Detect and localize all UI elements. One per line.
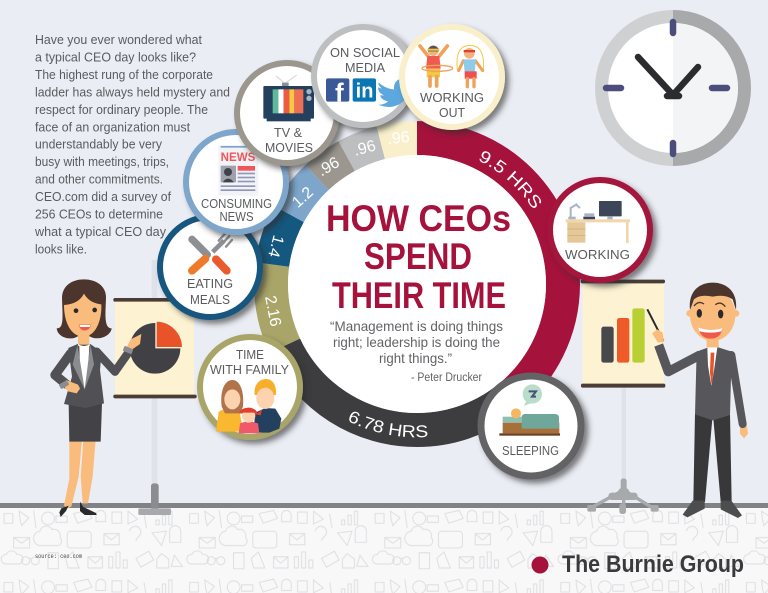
icon: newspaper: NEWS: [221, 150, 255, 164]
icon: television: [263, 75, 314, 121]
icon: social logos: [326, 78, 413, 108]
circle: on social media: MEDIA: [345, 61, 386, 75]
woman presenter: [55, 279, 141, 517]
circle: time with family: WITH FAMILY: [210, 363, 290, 377]
intro text: ladder has always held mystery and: [35, 84, 230, 99]
circle: eating meals: MEALS: [190, 293, 230, 307]
intro text: understandably be very: [35, 137, 162, 152]
quote: [330, 318, 503, 384]
clock: [595, 10, 751, 166]
circle: working out: WORKING: [420, 91, 484, 105]
title: SPEND: [364, 236, 472, 277]
intro text: The highest rung of the corporate: [35, 67, 213, 82]
intro text: a typical CEO day looks like?: [35, 50, 196, 64]
source note: source: ceo.com: [35, 553, 82, 560]
circle: time with family: [200, 337, 300, 437]
ring values: small segments: [261, 129, 411, 328]
circle: on social media: [314, 27, 413, 125]
quote: “Management is doing things: [330, 318, 503, 334]
ring values: small segments: 2.16: [261, 294, 284, 328]
ring values: small segments: 1.2: [289, 184, 317, 211]
circle: eating meals: EATING: [187, 277, 233, 291]
right flip chart with bars: [581, 280, 665, 514]
circle: sleeping: [481, 376, 581, 476]
intro text: and other commitments.: [35, 172, 163, 187]
circle: tv and movies: [237, 63, 337, 163]
ring value: 9.5 HRS: 9.5 HRS: [480, 151, 542, 208]
intro text: [34, 32, 230, 256]
brand logo: The Burnie Group: [562, 551, 744, 578]
icon: desk: [566, 201, 630, 243]
intro text: busy with meetings, trips,: [35, 154, 169, 169]
circle: working out: [402, 27, 502, 127]
circle: consuming news: [186, 132, 286, 232]
title: THEIR TIME: [332, 275, 506, 316]
intro text: respect for ordinary people. The: [35, 102, 208, 117]
circle: consuming news: NEWS: [220, 210, 254, 224]
donut chart: hours per activity: [271, 138, 563, 430]
icon: exercising figures: [420, 45, 484, 87]
circle: working out: OUT: [439, 106, 465, 120]
left flip chart with pie: [113, 260, 197, 515]
circle: consuming news: CONSUMING: [201, 197, 272, 211]
man presenter: [647, 283, 748, 518]
ring values: small segments: 1.4: [264, 233, 286, 259]
circle: working: [550, 180, 650, 280]
ring values: small segments: .96: [315, 154, 343, 180]
quote: right things.”: [379, 350, 452, 366]
intro text: CEO.com did a survey of: [35, 189, 171, 204]
icon: social logos: f: [335, 78, 344, 108]
circle: tv and movies: TV &: [274, 126, 303, 140]
icon: family: [216, 379, 281, 433]
donut centre: [288, 155, 546, 413]
icon: social logos: in: [356, 81, 373, 103]
floor with doodle pattern: [0, 503, 768, 593]
intro text: Have you ever wondered what: [35, 32, 202, 47]
intro text: 256 CEOs to determine: [35, 206, 163, 222]
circle: tv and movies: MOVIES: [265, 141, 313, 155]
icon: knife and fork: [192, 233, 232, 271]
ring value: 6.78 HRS: 6.78 HRS: [349, 412, 428, 438]
ring values: small segments: .96: [352, 138, 378, 160]
ring values: small segments: .96: [387, 129, 411, 148]
icon: bed with sleeper: [499, 384, 560, 436]
quote: right; leadership is doing the: [333, 334, 500, 350]
intro text: what a typical CEO day: [34, 224, 166, 239]
circle: working: WORKING: [565, 248, 630, 262]
circle: time with family: TIME: [236, 348, 264, 362]
circle: on social media: ON SOCIAL: [330, 46, 400, 60]
intro text: face of an organization must: [35, 119, 190, 134]
intro text: looks like.: [35, 241, 87, 256]
circle: sleeping: SLEEPING: [502, 444, 559, 458]
title: HOW CEOs: [326, 198, 511, 239]
circle: eating meals: [160, 217, 260, 317]
title: [326, 198, 511, 316]
quote: - Peter Drucker: [411, 372, 482, 384]
